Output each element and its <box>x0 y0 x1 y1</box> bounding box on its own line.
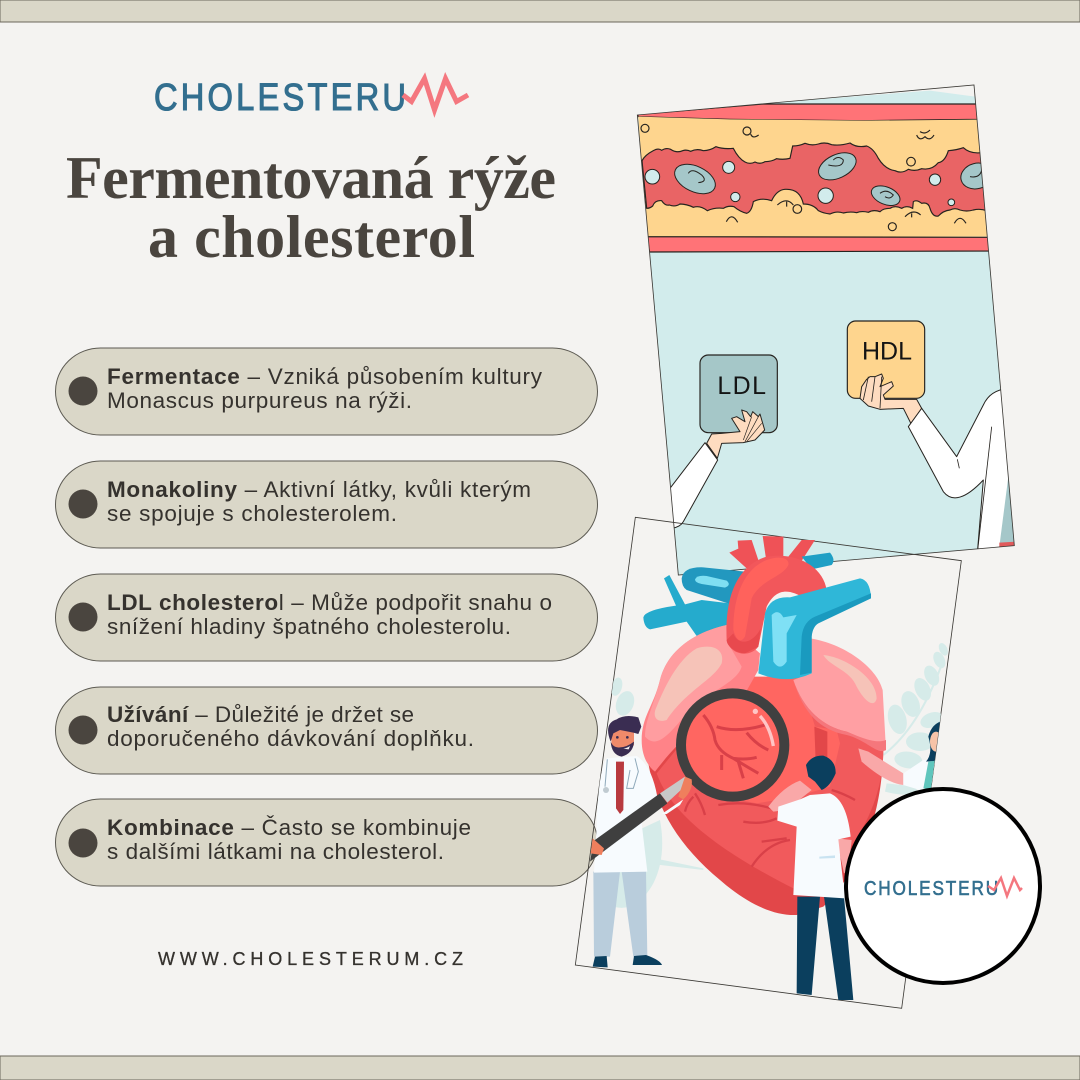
artery wall red lower <box>647 237 989 252</box>
left blue vessels <box>643 575 730 636</box>
item: LDL cholesterol: LDL cholesterol – Může podpořit snahu o <box>107 590 552 615</box>
artery wall red upper <box>637 104 978 121</box>
arm holding HDL <box>860 374 1017 553</box>
item: LDL cholesterol <box>56 574 598 661</box>
badge: circular logo <box>846 789 1040 983</box>
item: Kombinace: Kombinace – Často se kombinuje <box>107 815 471 840</box>
top band <box>0 0 1080 22</box>
pulmonary artery <box>758 578 871 679</box>
item: Fermentace: Fermentace – Vzniká působením kultury <box>107 364 543 389</box>
heart upper <box>703 677 840 803</box>
blood cell details <box>688 157 982 198</box>
item: Fermentace: Monascus purpureus na rýži. <box>107 388 412 413</box>
heart mid <box>657 677 883 890</box>
plaque details <box>641 124 966 231</box>
title: a cholesterol <box>148 204 475 270</box>
card: HDL <box>847 321 925 398</box>
item: Monakoliny: Monakoliny – Aktivní látky, kvůli kterým <box>107 477 531 502</box>
doctor left <box>593 716 683 967</box>
panel: list of facts <box>56 348 598 886</box>
top vessels red <box>729 536 815 570</box>
item: Monakoliny: se spojuje s cholesterolem. <box>107 501 397 526</box>
item: Monakoliny <box>56 461 598 548</box>
item: Užívání: Užívání – Důležité je držet se <box>107 702 414 727</box>
item: Užívání <box>56 687 598 774</box>
logo: Cholesterum: CHOLESTERU <box>154 76 406 119</box>
card: HDL: HDL <box>862 337 912 365</box>
artery plaque yellow <box>638 117 989 237</box>
item: Kombinace: s dalšími látkami na cholesterol. <box>107 839 444 864</box>
left atrium <box>642 625 760 772</box>
item: LDL cholesterol: snížení hladiny špatného cholesterolu. <box>107 614 511 639</box>
heart body <box>642 536 886 915</box>
card: LDL <box>700 355 777 433</box>
panel: artery illustration with LDL and HDL <box>637 85 1017 575</box>
card: LDL: LDL <box>717 372 766 400</box>
magnifying glass <box>590 693 784 862</box>
website url: WWW.CHOLESTERUM.CZ <box>158 949 463 969</box>
doctor right <box>768 756 853 1000</box>
arm holding LDL <box>670 410 765 528</box>
right atrium <box>793 638 886 751</box>
item: Užívání: doporučeného dávkování doplňku. <box>107 726 474 751</box>
bubbles <box>645 161 955 206</box>
frame <box>575 517 961 1008</box>
item: Kombinace <box>56 799 598 886</box>
item: Fermentace <box>56 348 598 435</box>
title: Fermentovaná rýže <box>66 145 556 211</box>
top right blue vessel <box>802 553 833 569</box>
title <box>66 145 556 270</box>
background leaves <box>609 642 950 908</box>
artery lumen <box>642 143 987 216</box>
bottom band <box>0 1056 1080 1080</box>
badge: circular logo: CHOLESTERU <box>864 877 998 899</box>
coat edge strip <box>999 479 1014 546</box>
heart dark base <box>648 670 883 915</box>
assistant on right with pointing arm <box>858 721 945 790</box>
aorta <box>726 556 827 654</box>
panel: heart illustration with doctors <box>575 517 961 1008</box>
red blood cells <box>670 147 995 209</box>
upper blue vessel <box>682 567 745 604</box>
